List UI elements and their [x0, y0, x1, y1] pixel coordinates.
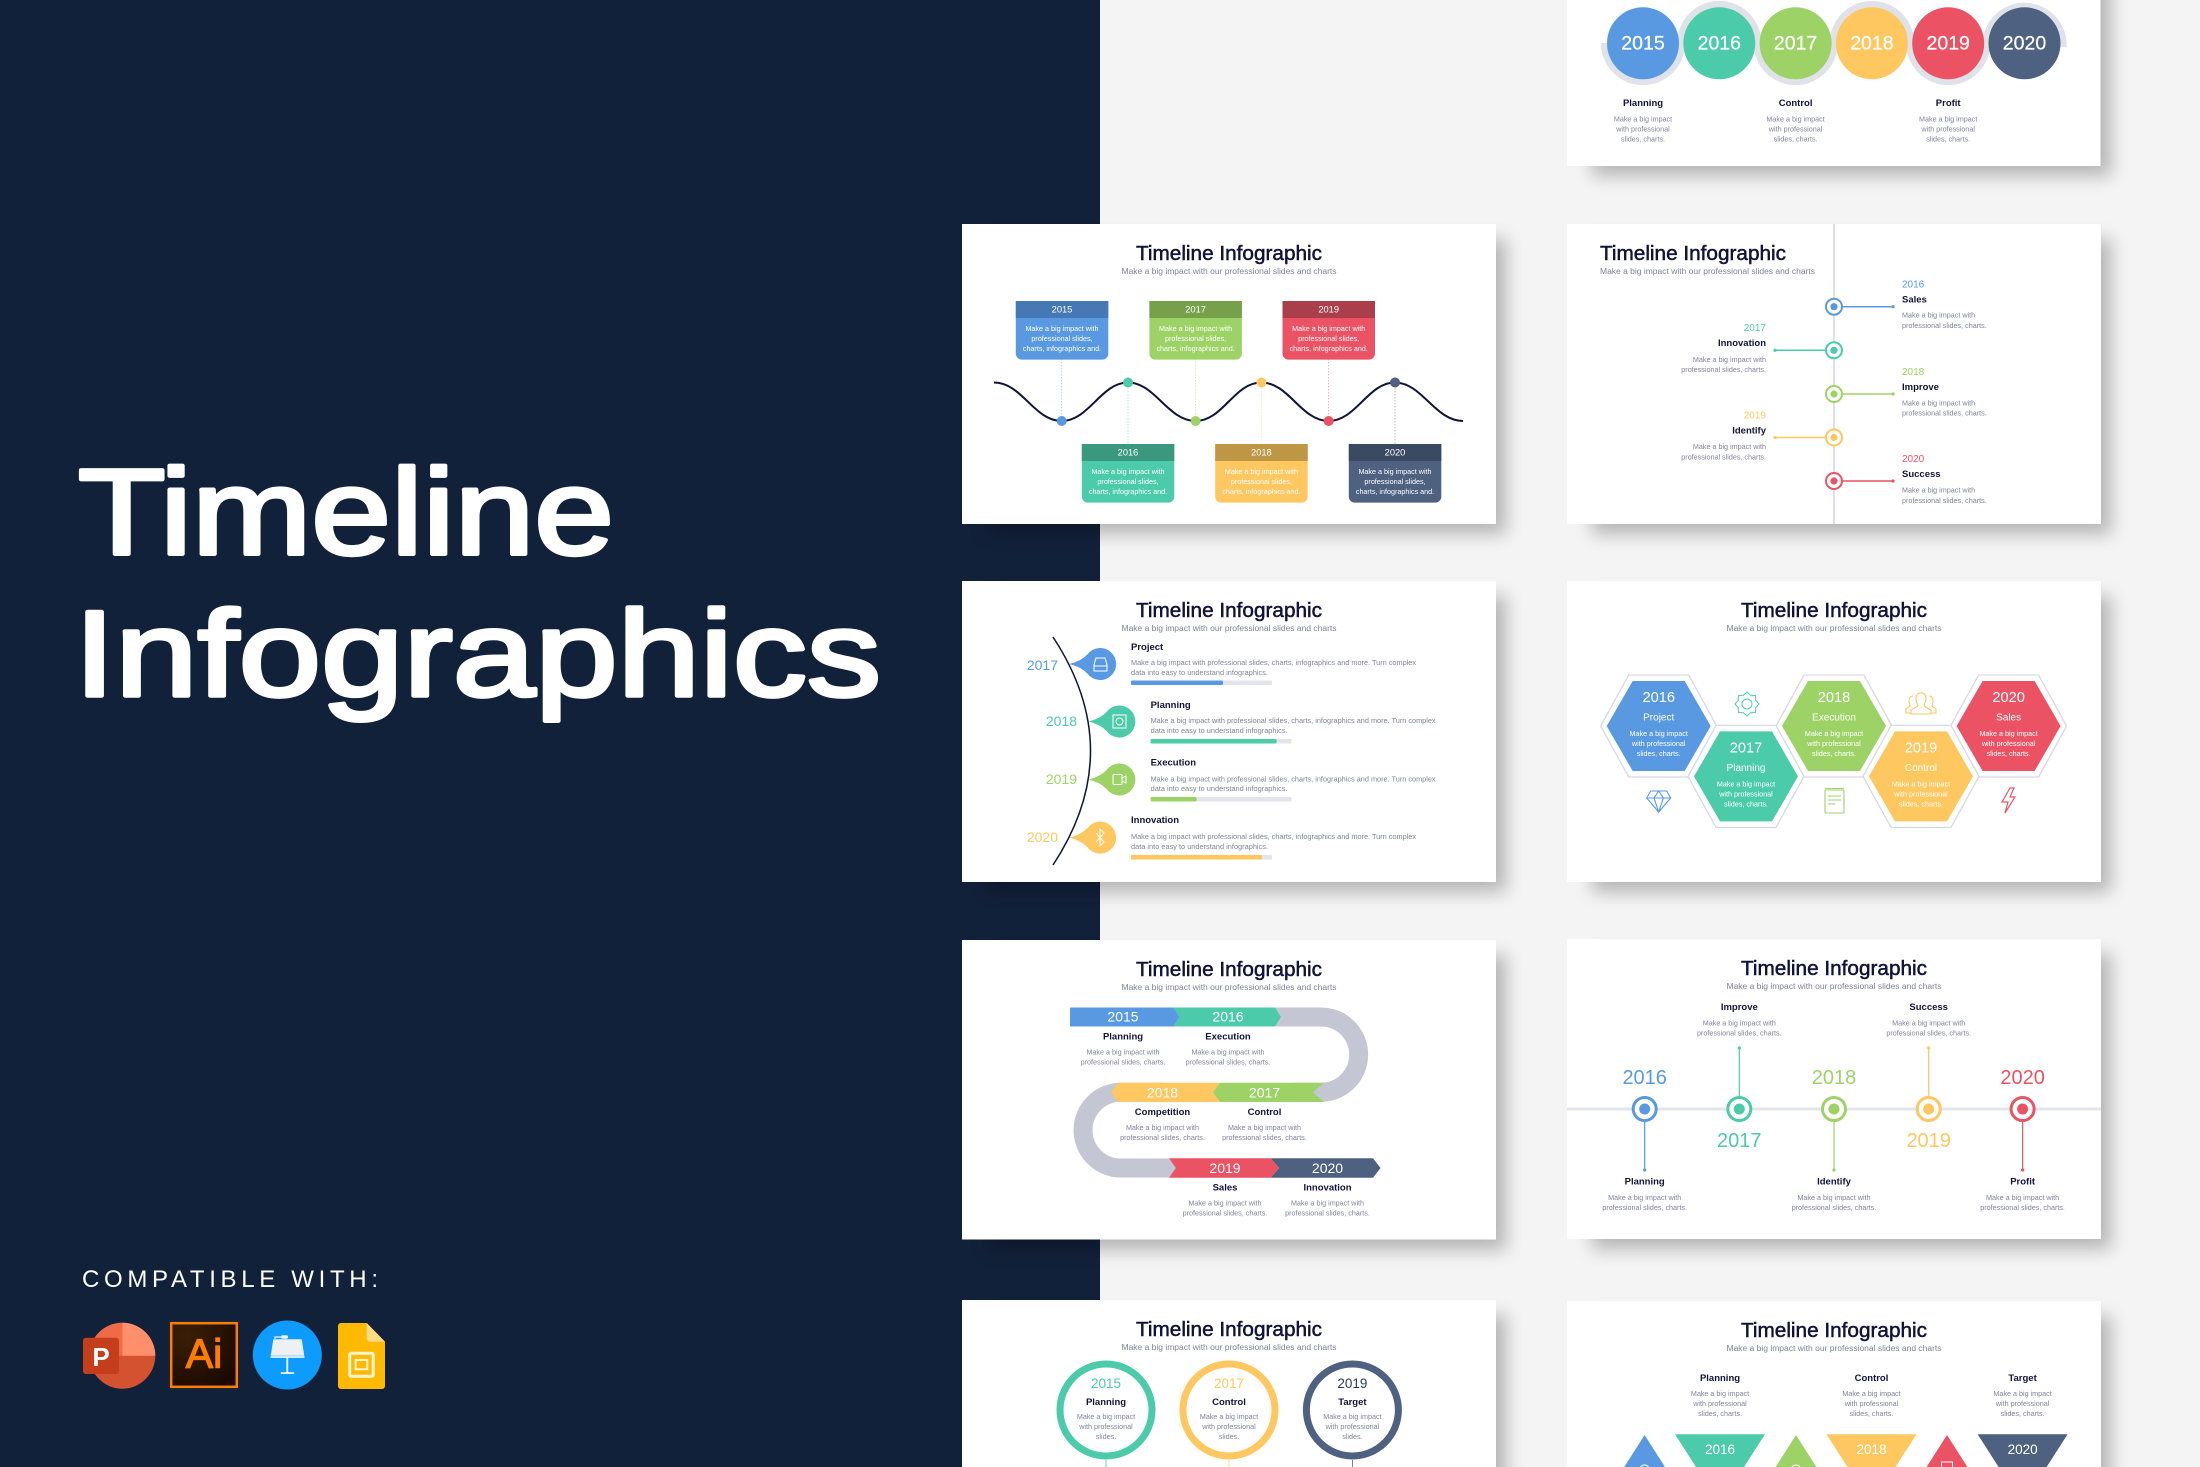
hexagon 2016 Project: Project — [1643, 712, 1674, 724]
hexagon 2018 Execution: Make a big impact — [1805, 729, 1863, 738]
ring 2019 Target: with professional — [1325, 1422, 1380, 1431]
wave ribbon behind circles — [1605, 5, 2063, 81]
heading: Make a big impact with our professional slides and charts — [1122, 267, 1336, 276]
node 2019 Identify: professional slides, charts. — [1681, 452, 1766, 461]
step: Control: with professional — [1844, 1399, 1899, 1408]
node 2019 Success: professional slides, charts. — [1886, 1029, 1971, 1038]
arrow 2018: 2018 — [1147, 1084, 1178, 1100]
step: Control: Make a big impact with — [1228, 1123, 1301, 1132]
card: 2019: professional slides, — [1298, 334, 1359, 343]
trapezoid: 2018: 2018 — [1856, 1442, 1887, 1457]
step: Profit — [1919, 98, 1977, 144]
node 2019 Identify: Identify — [1732, 425, 1767, 436]
icon: Keynote — [253, 1320, 322, 1390]
hexagon 2020 Sales — [1951, 675, 2067, 777]
node 2019 Success: 2019 — [1906, 1130, 1951, 1152]
node 2020 Success: Success — [1902, 469, 1941, 480]
row 2019 Execution — [1046, 757, 1436, 802]
card: 2016: professional slides, — [1097, 477, 1159, 486]
panel: horizontal timeline — [1567, 939, 2101, 1239]
panel: snake road timeline — [962, 940, 1496, 1240]
step: Profit: Profit — [1936, 98, 1961, 109]
heading — [1122, 1318, 1336, 1352]
hexagon 2020 Sales: with professional — [1981, 739, 2036, 748]
step: Sales: professional slides, charts. — [1183, 1208, 1267, 1218]
card: 2020: 2020 — [1385, 448, 1405, 458]
icon: Google Slides — [338, 1323, 385, 1389]
node 2018 Improve: 2018 — [1902, 367, 1925, 378]
heading: Timeline Infographic — [1136, 958, 1322, 981]
node 2019 Identify: 2019 — [1744, 410, 1766, 421]
node 2020 Success: Make a big impact with — [1902, 486, 1975, 494]
panel: vertical timeline — [1567, 224, 2101, 524]
step: Profit: Make a big impact — [1919, 115, 1977, 124]
heading: Make a big impact with our professional slides and charts — [1122, 983, 1336, 992]
row 2018 Planning: 2018 — [1046, 713, 1077, 729]
step: Control — [1842, 1373, 1901, 1418]
hexagon 2019 Control: Make a big impact — [1892, 779, 1950, 788]
panel: wave timeline — [962, 224, 1496, 524]
hexagon 2016 Project: Make a big impact — [1630, 729, 1688, 738]
arrow 2019: 2019 — [1209, 1160, 1241, 1176]
panel: ring timeline (bottom, cropped) — [962, 1300, 1496, 1467]
node 2018 Improve — [1826, 367, 1987, 418]
ring 2019 Target: 2019 — [1337, 1376, 1367, 1391]
card: 2017 — [1149, 301, 1242, 360]
panel: triangle timeline (bottom, cropped) — [1567, 1301, 2101, 1467]
ring 2017 Control: Make a big impact — [1200, 1412, 1258, 1421]
hexagon 2016 Project: slides, charts. — [1637, 749, 1681, 758]
heading: Timeline Infographic — [1136, 599, 1322, 622]
node 2020 Success — [1826, 454, 1987, 505]
hexagon 2017 Planning — [1688, 725, 1804, 827]
arrow 2018 — [1111, 1083, 1220, 1102]
heading — [1122, 958, 1336, 992]
card: 2017: Make a big impact with — [1159, 324, 1232, 333]
step: Planning: Planning — [1103, 1032, 1143, 1042]
step: Competition — [1120, 1107, 1205, 1142]
node 2017 Innovation: professional slides, charts. — [1681, 365, 1766, 374]
icon: Illustrator: Ai — [186, 1330, 222, 1376]
step: Planning — [1614, 98, 1672, 144]
hexagon 2017 Planning: Make a big impact — [1717, 779, 1775, 788]
row 2017 Project: 2017 — [1027, 657, 1058, 673]
wave points — [1057, 378, 1400, 426]
heading: Make a big impact with our professional slides and charts — [1122, 1343, 1336, 1352]
step: Planning: Make a big impact — [1691, 1389, 1749, 1398]
card: 2020 — [1349, 444, 1441, 503]
heading — [1122, 242, 1336, 276]
row 2019 Execution: Make a big impact with professional slides, charts, infographics and more. Turn complex — [1151, 774, 1436, 783]
node 2018 Identify: 2018 — [1812, 1067, 1856, 1089]
step: Sales: Sales — [1213, 1182, 1237, 1194]
node 2018 Identify — [1792, 1067, 1876, 1212]
row 2018 Planning: Make a big impact with professional slides, charts, infographics and more. Turn complex — [1151, 716, 1436, 725]
ring 2019 Target: Target — [1338, 1397, 1367, 1408]
node 2016 Planning — [1602, 1067, 1687, 1212]
arrow 2017: 2017 — [1249, 1084, 1280, 1100]
step: Execution: Execution — [1205, 1032, 1251, 1042]
main title: Infographics — [74, 586, 881, 722]
step: Innovation: Make a big impact with — [1291, 1198, 1364, 1208]
ring 2015 Planning: slides. — [1096, 1432, 1116, 1441]
panel: circles timeline (top, cropped) — [1567, 0, 2100, 166]
trapezoid: 2020 — [1978, 1434, 2068, 1467]
heading: Make a big impact with our professional slides and charts — [1726, 624, 1942, 633]
step: Competition: Make a big impact with — [1126, 1123, 1199, 1132]
ring 2019 Target: slides. — [1342, 1432, 1363, 1441]
wave line — [994, 382, 1463, 421]
triangle: green — [1776, 1435, 1816, 1467]
card: 2019: 2019 — [1318, 304, 1339, 314]
node 2017 Innovation: Innovation — [1718, 338, 1766, 349]
card: 2018 — [1215, 444, 1308, 503]
node 2018 Identify: Identify — [1817, 1176, 1852, 1188]
arrow 2019 — [1169, 1158, 1279, 1178]
ring 2017 Control: 2017 — [1214, 1376, 1244, 1391]
icon: lightning bolt — [2002, 788, 2015, 813]
card: 2016 — [1082, 444, 1174, 503]
ring 2017 Control: with professional — [1201, 1422, 1256, 1431]
node 2016 Planning: professional slides, charts. — [1602, 1203, 1687, 1212]
arrow 2020: 2020 — [1312, 1160, 1343, 1176]
node 2017 Improve: Make a big impact with — [1703, 1018, 1776, 1028]
card: 2016: 2016 — [1118, 448, 1138, 458]
year circles: 2019 — [1927, 32, 1970, 54]
card: 2015: charts, infographics and. — [1023, 344, 1101, 353]
ring 2015 Planning: Make a big impact — [1077, 1412, 1135, 1421]
step: Innovation — [1285, 1182, 1370, 1218]
step: Target: Make a big impact — [1993, 1389, 2052, 1398]
node 2020 Profit: 2020 — [2000, 1067, 2045, 1089]
year circles — [1607, 7, 2060, 79]
node 2018 Identify: professional slides, charts. — [1792, 1203, 1876, 1212]
heading: Make a big impact with our professional slides and charts — [1600, 267, 1815, 276]
hexagon 2019 Control — [1863, 725, 1979, 827]
node 2020 Profit — [1980, 1067, 2065, 1212]
trapezoid: 2018 — [1826, 1434, 1916, 1467]
hexagon 2017 Planning: slides, charts. — [1724, 799, 1768, 808]
main title — [74, 444, 881, 722]
card: 2015 — [1016, 301, 1108, 360]
heading — [1726, 1319, 1942, 1353]
arrow 2016: 2016 — [1212, 1008, 1244, 1024]
card: 2017: professional slides, — [1165, 334, 1226, 343]
card: 2017: charts, infographics and. — [1156, 344, 1235, 353]
step: Control: with professional — [1768, 125, 1823, 134]
node 2016 Planning: Planning — [1625, 1176, 1665, 1188]
icon: diamond — [1647, 791, 1671, 812]
year circles: 2015 — [1621, 32, 1665, 54]
hexagon 2017 Planning: with professional — [1718, 789, 1773, 798]
step: Control: Control — [1779, 98, 1812, 109]
step: Planning: with professional — [1615, 125, 1670, 134]
step: Planning: slides, charts. — [1698, 1409, 1742, 1418]
card: 2019: charts, infographics and. — [1290, 344, 1368, 353]
node 2019 Success: Success — [1909, 1002, 1948, 1013]
step: Planning: professional slides, charts. — [1081, 1057, 1165, 1066]
row 2018 Planning — [1046, 700, 1436, 744]
hexagon 2018 Execution: slides, charts. — [1812, 749, 1856, 758]
trapezoid: 2016 — [1675, 1434, 1765, 1467]
arrow 2015 — [1070, 1008, 1180, 1026]
main title: Timeline — [78, 444, 614, 580]
node 2017 Improve: 2017 — [1717, 1130, 1762, 1152]
node 2016 Sales: professional slides, charts. — [1902, 321, 1987, 330]
ring 2015 Planning: 2015 — [1091, 1376, 1121, 1391]
step: Control — [1766, 98, 1825, 144]
arc line — [1053, 637, 1090, 865]
heading — [1122, 599, 1336, 633]
hexagon 2017 Planning: Planning — [1727, 763, 1765, 774]
step: Control: slides, charts. — [1850, 1409, 1893, 1418]
step: Execution — [1186, 1032, 1270, 1066]
step: Planning: Make a big impact with — [1086, 1047, 1160, 1056]
card: 2019: Make a big impact with — [1292, 324, 1365, 333]
node 2019 Success: Make a big impact with — [1892, 1018, 1965, 1028]
step: Target — [1993, 1373, 2052, 1418]
step: Sales — [1183, 1182, 1267, 1218]
node 2020 Success: 2020 — [1902, 454, 1925, 465]
row 2020 Innovation: Make a big impact with professional slides, charts, infographics and more. Turn complex — [1131, 832, 1416, 841]
node 2016 Planning: 2016 — [1622, 1067, 1667, 1089]
row 2020 Innovation — [1027, 815, 1416, 860]
card: 2018: charts, infographics and. — [1222, 487, 1301, 496]
heading: Timeline Infographic — [1136, 242, 1322, 265]
heading: Timeline Infographic — [1136, 1318, 1322, 1341]
compatible with heading: COMPATIBLE WITH: — [82, 1266, 378, 1293]
step: Planning — [1691, 1373, 1749, 1418]
node 2018 Improve: professional slides, charts. — [1902, 409, 1987, 418]
node 2020 Profit: professional slides, charts. — [1980, 1203, 2065, 1212]
heading — [1726, 957, 1942, 991]
card: 2018: 2018 — [1251, 448, 1272, 458]
card: 2016: Make a big impact with — [1091, 467, 1165, 476]
heading — [1726, 599, 1942, 633]
step: Control — [1222, 1107, 1307, 1142]
ring 2015 Planning: Planning — [1086, 1397, 1126, 1408]
card: 2018: professional slides, — [1231, 477, 1292, 486]
year circles: 2016 — [1698, 32, 1741, 54]
card: 2020: Make a big impact with — [1358, 467, 1432, 476]
node 2016 Sales: 2016 — [1902, 280, 1925, 290]
node 2017 Innovation: Make a big impact with — [1693, 355, 1766, 364]
node 2019 Identify — [1681, 410, 1842, 461]
node 2020 Profit: Profit — [2010, 1176, 2036, 1188]
triangle: red — [1927, 1435, 1967, 1467]
hexagon 2019 Control: slides, charts. — [1899, 799, 1943, 808]
step: Control: Make a big impact — [1766, 115, 1825, 124]
node 2016 Sales — [1826, 280, 1987, 330]
hexagon 2019 Control: with professional — [1893, 789, 1948, 798]
card: 2018: Make a big impact with — [1225, 467, 1298, 476]
icon: people — [1906, 693, 1936, 714]
step: Planning: Make a big impact — [1614, 115, 1672, 124]
arrow 2016 — [1174, 1008, 1281, 1026]
ring 2017 Control: slides. — [1219, 1432, 1239, 1441]
icon: PowerPoint — [83, 1323, 155, 1389]
hexagon 2016 Project: 2016 — [1642, 690, 1675, 706]
row 2017 Project: data into easy to understand infographics. — [1131, 668, 1268, 677]
panel: hexagon timeline — [1567, 581, 2101, 882]
step: Control: Control — [1248, 1107, 1281, 1118]
step: Control: professional slides, charts. — [1222, 1133, 1307, 1142]
row 2018 Planning: Planning — [1151, 700, 1191, 711]
node 2017 Innovation — [1681, 323, 1842, 374]
node 2018 Improve: Improve — [1902, 382, 1939, 393]
node 2017 Improve — [1697, 1002, 1782, 1152]
step: Innovation: Innovation — [1303, 1182, 1352, 1194]
node 2016 Sales: Make a big impact with — [1902, 311, 1975, 320]
grey road — [1083, 1017, 1359, 1168]
panel: arc timeline — [962, 581, 1496, 882]
step: Planning — [1081, 1032, 1165, 1066]
step: Control: Make a big impact — [1842, 1389, 1901, 1398]
hexagon 2018 Execution: with professional — [1806, 739, 1861, 748]
card: 2015: 2015 — [1052, 304, 1072, 314]
hexagon 2020 Sales: slides, charts. — [1987, 749, 2031, 758]
step: Execution: professional slides, charts. — [1186, 1057, 1270, 1066]
card: 2015: Make a big impact with — [1025, 324, 1099, 333]
heading: Make a big impact with our professional slides and charts — [1122, 624, 1336, 633]
card: 2016: charts, infographics and. — [1089, 487, 1167, 496]
arrow 2017 — [1213, 1083, 1324, 1102]
step: Competition: Competition — [1135, 1107, 1190, 1118]
heading: Make a big impact with our professional slides and charts — [1726, 982, 1942, 991]
icon: gear — [1735, 692, 1759, 716]
step: Target: Target — [2008, 1373, 2038, 1384]
arrow 2015: 2015 — [1107, 1008, 1139, 1024]
step: Control: slides, charts. — [1774, 135, 1818, 144]
step: Planning: with professional — [1692, 1399, 1747, 1408]
hexagon 2020 Sales: Sales — [1996, 712, 2021, 724]
year circles: 2020 — [2003, 32, 2046, 54]
ring 2017 Control: Control — [1212, 1397, 1246, 1408]
hexagon 2019 Control: 2019 — [1905, 740, 1937, 756]
trapezoid: 2016: 2016 — [1705, 1442, 1735, 1457]
node 2017 Improve: Improve — [1721, 1002, 1758, 1013]
hexagon 2018 Execution: Execution — [1812, 712, 1856, 724]
step: Profit: with professional — [1920, 125, 1975, 134]
year circles: 2018 — [1850, 32, 1894, 54]
node 2018 Identify: Make a big impact with — [1797, 1193, 1871, 1202]
year circles: 2017 — [1774, 32, 1817, 54]
ring 2019 Target — [1306, 1364, 1398, 1467]
node 2020 Profit: Make a big impact with — [1986, 1193, 2059, 1202]
row 2020 Innovation: 2020 — [1027, 829, 1058, 845]
heading: Timeline Infographic — [1741, 957, 1927, 980]
row 2020 Innovation: Innovation — [1131, 815, 1179, 826]
row 2019 Execution: Execution — [1151, 757, 1196, 768]
step: Planning: Planning — [1700, 1373, 1740, 1384]
hexagon 2020 Sales: 2020 — [1992, 690, 2025, 706]
row 2017 Project: Make a big impact with professional slides, charts, infographics and more. Turn complex — [1131, 658, 1416, 667]
arrow 2020 — [1270, 1158, 1380, 1178]
node 2016 Sales: Sales — [1902, 294, 1927, 305]
hexagon 2018 Execution: 2018 — [1818, 690, 1850, 706]
heading: Timeline Infographic — [1741, 1319, 1927, 1342]
card: 2017: 2017 — [1185, 304, 1206, 314]
card: 2019 — [1282, 301, 1375, 360]
row 2019 Execution: data into easy to understand infographics. — [1151, 784, 1288, 793]
trapezoid: 2020: 2020 — [2008, 1442, 2038, 1457]
step: Competition: professional slides, charts. — [1120, 1133, 1205, 1142]
ring 2015 Planning — [1060, 1364, 1152, 1467]
ring 2017 Control — [1183, 1364, 1275, 1467]
card: 2020: charts, infographics and. — [1356, 487, 1434, 496]
hexagon 2017 Planning: 2017 — [1730, 740, 1762, 756]
row 2017 Project — [1027, 642, 1416, 685]
step: Target: with professional — [1995, 1399, 2050, 1408]
hexagon 2016 Project: with professional — [1631, 739, 1686, 748]
icon: notepad — [1825, 788, 1844, 813]
ring 2015 Planning: with professional — [1078, 1422, 1133, 1431]
step: Sales: Make a big impact with — [1188, 1198, 1262, 1208]
step: Control: Control — [1855, 1373, 1888, 1384]
card: 2020: professional slides, — [1364, 477, 1426, 486]
triangle: blue — [1624, 1435, 1665, 1467]
row 2017 Project: Project — [1131, 642, 1164, 653]
icon: PowerPoint: P — [92, 1342, 110, 1372]
hexagon 2018 Execution — [1776, 675, 1892, 777]
card: 2015: professional slides, — [1031, 334, 1093, 343]
node 2020 Success: professional slides, charts. — [1902, 496, 1987, 505]
step: Planning: slides, charts. — [1621, 135, 1665, 144]
row 2019 Execution: 2019 — [1046, 771, 1077, 787]
step: Profit: slides, charts. — [1926, 135, 1970, 144]
step: Target: slides, charts. — [2001, 1409, 2045, 1418]
row 2020 Innovation: data into easy to understand infographics. — [1131, 842, 1268, 851]
node 2018 Improve: Make a big impact with — [1902, 398, 1975, 407]
heading — [1600, 242, 1815, 276]
heading: Timeline Infographic — [1741, 599, 1927, 622]
step: Planning: Planning — [1623, 98, 1663, 109]
hexagon 2016 Project — [1601, 675, 1717, 777]
step: Innovation: professional slides, charts. — [1285, 1208, 1370, 1218]
node 2017 Innovation: 2017 — [1744, 323, 1766, 334]
icon: Illustrator — [171, 1323, 237, 1387]
heading: Make a big impact with our professional slides and charts — [1726, 1344, 1942, 1353]
ring 2019 Target: Make a big impact — [1323, 1412, 1382, 1421]
node 2016 Planning: Make a big impact with — [1608, 1193, 1681, 1202]
node 2019 Success — [1886, 1002, 1971, 1152]
heading: Timeline Infographic — [1600, 242, 1786, 265]
node 2017 Improve: professional slides, charts. — [1697, 1029, 1782, 1038]
node 2019 Identify: Make a big impact with — [1693, 442, 1766, 451]
row 2018 Planning: data into easy to understand infographics. — [1151, 726, 1288, 735]
hexagon 2020 Sales: Make a big impact — [1979, 729, 2038, 738]
hexagon 2019 Control: Control — [1905, 763, 1937, 774]
step: Execution: Make a big impact with — [1191, 1047, 1265, 1056]
